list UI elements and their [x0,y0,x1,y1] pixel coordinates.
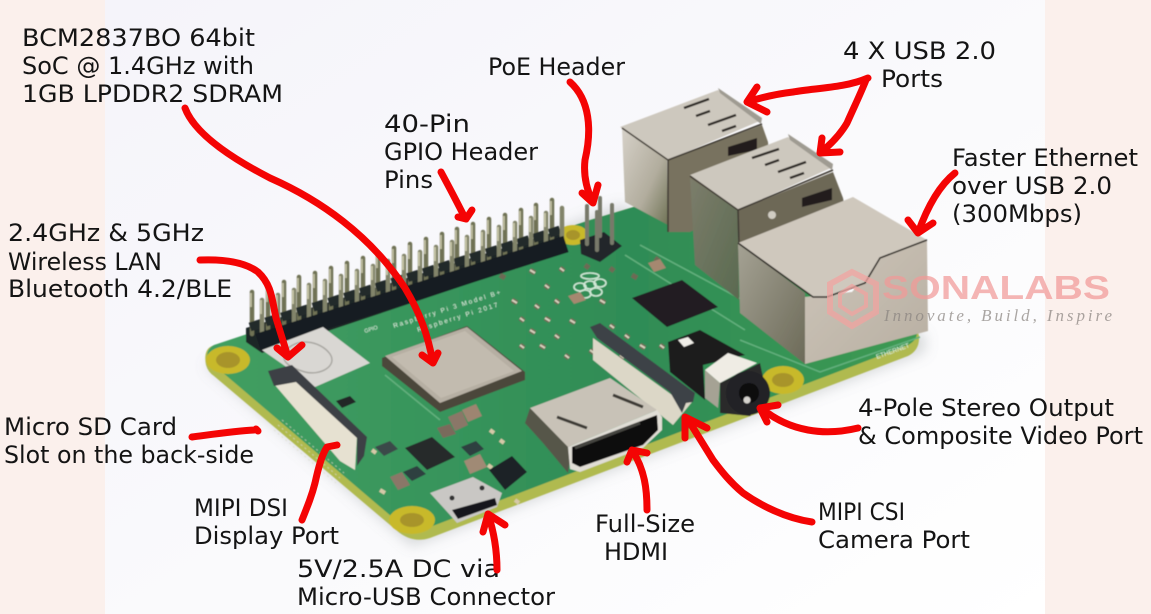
arrow: PoE [570,82,598,203]
label: MIPI DSI: MIPI DSI [194,494,288,522]
arrow: USB upper [747,78,868,112]
label: HDMI: Full-Size [595,510,695,538]
label: SoC: 1GB LPDDR2 SDRAM [22,80,283,108]
arrow: Ethernet [908,173,955,233]
label: MIPI CSI: MIPI CSI [818,498,905,526]
audio jack [668,330,770,416]
label: wireless: Wireless LAN [8,248,162,276]
label: Ethernet: Faster Ethernet [952,144,1138,172]
arrow: MIPI CSI [685,417,812,522]
label: micro SD [4,413,254,469]
label: PoE header: PoE Header [488,53,625,81]
label: MIPI DSI: Display Port [194,522,339,550]
silkscreen: Raspberry Pi 2017 [416,302,499,334]
USB port stack 1 [620,88,772,232]
label: Ethernet [952,144,1138,228]
label: audio: & Composite Video Port [858,422,1143,450]
label: GPIO: Pins [384,166,433,194]
arrow: audio [760,405,858,432]
HDMI port [525,378,662,473]
label: wireless: 2.4GHz & 5GHz [8,219,204,247]
label: power: Micro-USB Connector [297,583,555,611]
label: USB ports: 4 X USB 2.0 [843,37,996,65]
arrow: USB lower [820,80,866,153]
label: MIPI DSI [194,494,339,550]
label: SoC [22,24,283,108]
label: wireless [8,219,232,303]
ICs and capacitors [336,259,718,490]
label: audio [858,394,1143,450]
MIPI DSI connector [268,365,367,470]
PoE header [580,198,622,262]
label: SoC: BCM2837BO 64bit [22,24,255,52]
label: micro SD: Micro SD Card [4,413,177,441]
photo: Raspberry Pi board [205,88,928,546]
arrow: MIPI DSI [302,445,337,520]
label: GPIO [384,110,538,194]
GPIO header pins [246,200,566,353]
wireless chip [262,327,370,387]
label: micro SD: Slot on the back-side [4,441,254,469]
mounting holes [206,225,804,534]
label: GPIO: GPIO Header [384,138,538,166]
silkscreen: Raspberry Pi 3 Model B+ [392,289,502,330]
arrow: SoC [185,108,438,363]
silkscreen: GPIO [364,325,379,335]
silkscreen [364,289,911,361]
PCB [205,205,919,540]
label: USB ports: Ports [881,65,943,93]
label: Ethernet: (300Mbps) [952,200,1082,228]
label: power [297,555,555,611]
silkscreen: ETHERNET [875,342,911,361]
label: Ethernet: over USB 2.0 [952,172,1112,200]
label: USB ports [843,37,996,93]
arrow: micro USB [483,514,505,570]
arrow: micro SD [192,429,258,437]
label: power: 5V/2.5A DC via [297,555,500,583]
raspberry logo [574,273,606,298]
arrow: HDMI [627,450,647,510]
arrow: wireless [200,260,302,357]
label: MIPI CSI: Camera Port [818,526,970,554]
label: HDMI [595,510,695,566]
watermark: SONALABS: Innovate, Build, Inspire [883,306,1112,325]
watermark: SONALABS [830,269,1112,326]
label: GPIO: 40-Pin [384,110,470,138]
label: audio: 4-Pole Stereo Output [858,394,1114,422]
label: wireless: Bluetooth 4.2/BLE [8,275,232,303]
small PCB details [274,245,920,503]
BCM SoC chip [382,326,525,412]
label: HDMI: HDMI [604,538,668,566]
arrow: GPIO [441,172,472,219]
Ethernet port [738,197,928,364]
label: MIPI CSI [818,498,970,554]
label: SoC: SoC @ 1.4GHz with [22,52,254,80]
MIPI CSI connector [590,323,695,425]
micro USB port [430,477,502,523]
watermark: SONALABS: SONALABS [882,269,1110,306]
USB port stack 2 [690,134,848,300]
